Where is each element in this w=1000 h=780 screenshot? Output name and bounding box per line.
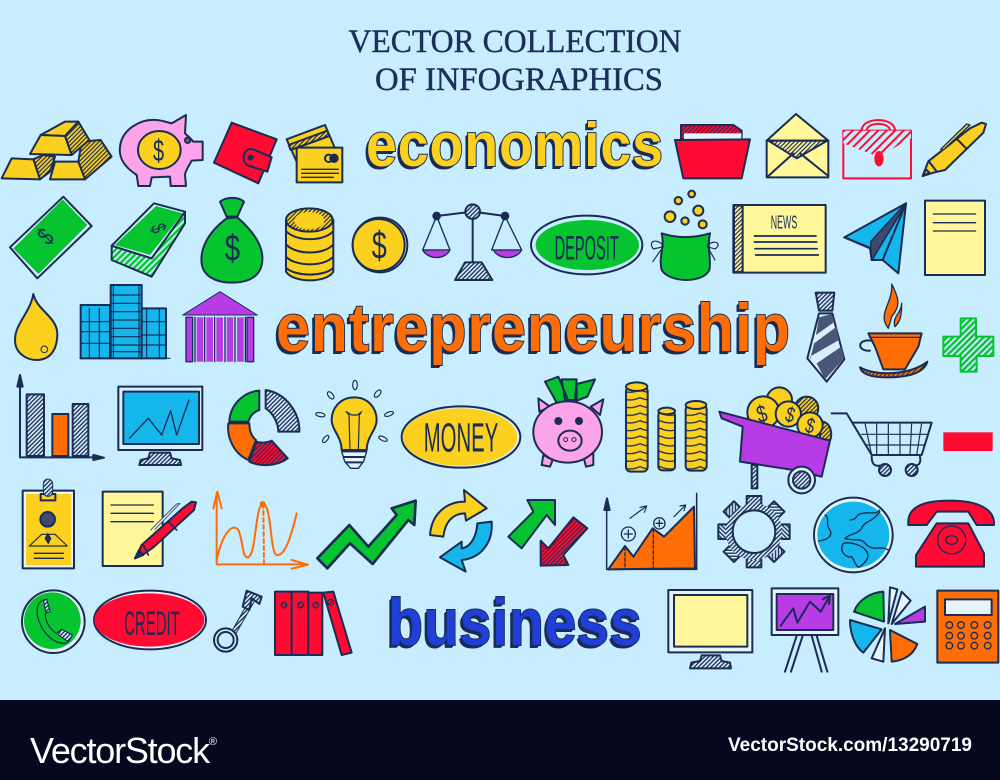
icon: banknote <box>10 197 92 278</box>
icon: pie chart <box>850 587 925 662</box>
icon: piggy with cash <box>533 377 603 467</box>
icon: note and pen <box>103 492 196 566</box>
icon: banknote: $ <box>32 222 60 250</box>
icon: money bag: $ <box>225 228 240 269</box>
icon: stack of money: $ <box>146 220 172 236</box>
icon: gear <box>718 496 790 567</box>
icon: stack of money <box>112 203 185 277</box>
title: OF INFOGRAPHICS <box>375 62 663 98</box>
icon: globe <box>814 498 893 572</box>
icon: bar chart <box>17 375 104 460</box>
icon: red telephone <box>908 501 994 567</box>
lower left icons <box>22 479 492 655</box>
icon: presentation board <box>772 588 838 672</box>
icon: monitor chart <box>118 387 202 465</box>
icon: id badge <box>23 479 74 568</box>
heading: economics: economics <box>366 111 664 180</box>
footer url: VectorStock.com/13290719 <box>728 735 972 756</box>
icon: orange line chart <box>213 492 308 569</box>
icon: wheelbarrow of coins: $ <box>754 401 770 428</box>
icon: wheelbarrow of coins: $ <box>803 413 818 438</box>
icon: city buildings <box>80 285 170 358</box>
icon: bank building <box>183 292 257 362</box>
icon: paper plane <box>844 203 906 273</box>
lower right icons <box>508 493 998 672</box>
icon: gold coin: $ <box>372 225 387 268</box>
icon: wheelbarrow of coins <box>719 387 831 493</box>
icon: credit badge: CREDIT <box>124 604 180 643</box>
icon: deposit badge <box>531 216 642 274</box>
upper left icons <box>2 115 522 283</box>
icon: piggy bank: $ <box>153 135 164 168</box>
icon: money badge <box>402 406 520 468</box>
icon: plus sign <box>943 318 993 372</box>
icon: deposit badge: DEPOSIT <box>555 228 619 267</box>
icon: minus sign <box>943 432 993 451</box>
icon: newspaper <box>733 205 826 273</box>
icon: blank monitor <box>668 590 752 668</box>
title: VECTOR COLLECTION <box>348 24 682 60</box>
icon: piggy bank <box>120 115 203 186</box>
icon: key <box>214 591 262 652</box>
middle right icons <box>533 284 993 493</box>
icon: credit cards <box>287 125 342 182</box>
icon: gold bars <box>2 122 112 179</box>
icon: coffee cup <box>860 284 927 377</box>
upper right icons <box>531 114 986 280</box>
icon: shopping cart <box>832 413 932 476</box>
icon: money bag <box>201 198 262 283</box>
icon: red folder <box>675 125 750 178</box>
icon: envelope <box>767 114 828 177</box>
icon: note sheet <box>925 201 985 275</box>
icon: newspaper: NEWS <box>771 213 797 233</box>
icon: money badge: MONEY <box>424 415 498 461</box>
icon: briefcase <box>843 120 911 178</box>
footer logo: VectorStock® <box>30 730 217 771</box>
icon: growth chart <box>604 493 697 569</box>
footer bar <box>0 700 1000 780</box>
title <box>348 24 682 98</box>
icon: balance scales <box>423 204 522 280</box>
icon: stacks of coins <box>626 382 707 472</box>
icon: pouch with coins <box>651 191 718 280</box>
icon: phone button <box>22 590 85 653</box>
icon: gold coin <box>353 218 407 272</box>
icon: exchange arrows <box>508 500 587 566</box>
middle left icons <box>15 285 520 468</box>
icon: oil drop <box>15 294 57 360</box>
icon: necktie <box>807 293 844 382</box>
icon: rising green arrow <box>317 501 416 568</box>
icon: light bulb <box>315 380 394 468</box>
icon: credit badge <box>94 591 206 649</box>
heading: entrepreneurship: entrepreneurship <box>276 290 791 366</box>
icon: coin stack <box>286 208 333 280</box>
icon: pen <box>923 123 986 176</box>
heading: business: business <box>388 585 642 659</box>
icon: wheelbarrow of coins: $ <box>783 402 798 427</box>
icon: donut chart <box>228 390 299 465</box>
icon: calculator <box>937 591 998 663</box>
icon: refresh arrows <box>430 490 492 572</box>
icon: wallet <box>214 123 277 183</box>
icon: binders <box>275 592 352 655</box>
